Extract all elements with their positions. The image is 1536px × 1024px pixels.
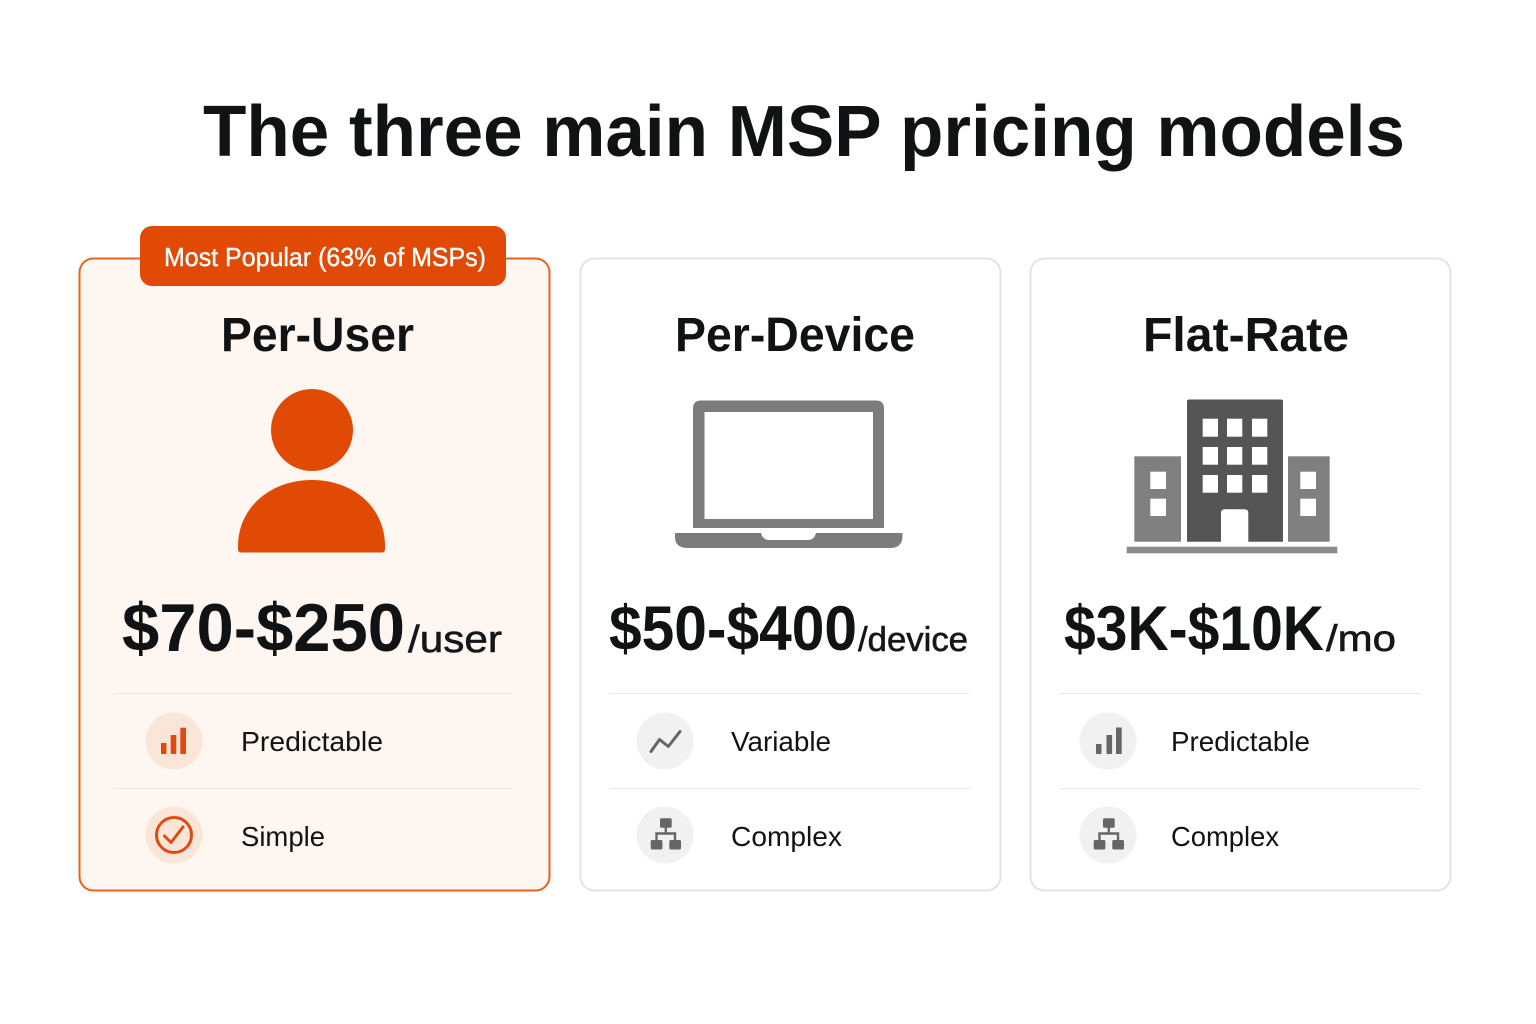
card background xyxy=(80,258,550,890)
label: variable: Variable xyxy=(731,726,831,757)
label: simple: Simple xyxy=(241,821,325,852)
heading: Per-User: Per-User xyxy=(221,309,414,362)
icon: check circle xyxy=(146,806,202,864)
icon: hierarchy xyxy=(636,806,694,864)
label: predictable: Predictable xyxy=(241,726,383,757)
badge: most popular xyxy=(140,226,506,286)
price: per device: /device xyxy=(858,621,968,659)
panel: Flat-Rate xyxy=(1030,258,1450,890)
label: complex: Complex xyxy=(1171,821,1279,852)
feature: complex xyxy=(636,806,842,864)
icon: hierarchy xyxy=(1080,806,1136,864)
icon: bar chart xyxy=(1080,712,1136,770)
label: complex: Complex xyxy=(731,821,842,852)
price: per month: /mo xyxy=(1326,618,1396,659)
feature: simple xyxy=(146,806,325,864)
panel: Per-Device xyxy=(580,258,1000,890)
icon: bar chart xyxy=(146,712,202,770)
icon: laptop xyxy=(675,400,902,548)
feature: predictable xyxy=(1080,712,1310,770)
card background xyxy=(580,258,1000,890)
price: per device: $50-$400 xyxy=(609,594,857,664)
title: The three main MSP pricing models xyxy=(203,92,1405,172)
icon: trend line xyxy=(636,712,694,770)
feature: variable xyxy=(636,712,831,770)
badge: most popular: Most Popular (63% of MSPs) xyxy=(164,242,486,272)
icon: person xyxy=(238,389,385,552)
heading: Per-Device: Per-Device xyxy=(675,309,915,362)
price: per user: /user xyxy=(408,619,502,661)
card background xyxy=(1030,258,1450,890)
heading: Flat-Rate: Flat-Rate xyxy=(1143,309,1349,362)
price: per month: $3K-$10K xyxy=(1064,594,1324,664)
panel: Per-User xyxy=(80,226,550,890)
icon: office buildings xyxy=(1127,400,1337,553)
price: per user: $70-$250 xyxy=(122,590,405,666)
label: predictable: Predictable xyxy=(1171,726,1310,757)
feature: complex xyxy=(1080,806,1279,864)
feature: predictable xyxy=(146,712,383,770)
